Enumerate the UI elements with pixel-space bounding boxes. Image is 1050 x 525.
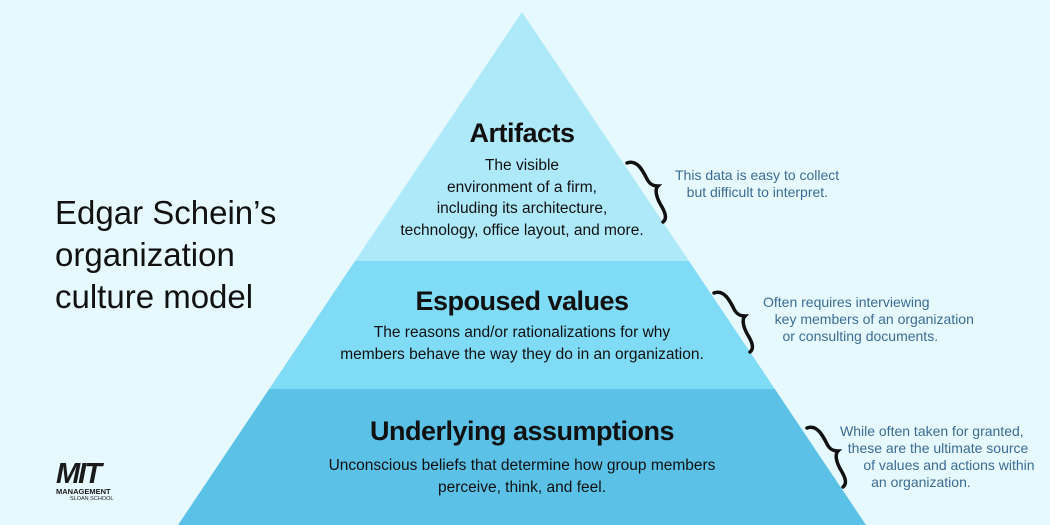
title: culture model <box>55 278 253 315</box>
brace 3 <box>807 427 846 487</box>
pyramid <box>178 12 866 525</box>
underlying text: perceive, think, and feel. <box>438 478 606 496</box>
brace 1 <box>627 162 666 222</box>
title: Edgar Schein’s <box>55 194 276 231</box>
logo <box>56 458 114 502</box>
artifacts text: environment of a firm, <box>447 178 597 196</box>
underlying heading: Underlying assumptions <box>370 416 674 446</box>
brace 2 <box>714 292 753 352</box>
note 1: This data is easy to collect but difficult to interpret. <box>675 167 839 200</box>
underlying text <box>329 457 715 496</box>
note 2: Often requires interviewing key members of an organization or consulting documents. <box>763 294 974 344</box>
espoused heading: Espoused values <box>415 286 629 316</box>
logo: SLOAN SCHOOL <box>70 496 113 502</box>
espoused text: members behave the way they do in an organization. <box>340 346 704 362</box>
title <box>55 194 276 315</box>
artifacts text: The visible <box>485 157 559 174</box>
note 3: While often taken for granted, these are the ultimate source of values and actions within an organization. <box>840 423 1035 490</box>
logo: MIT <box>56 458 100 490</box>
espoused text <box>340 324 704 362</box>
logo: MANAGEMENT <box>56 487 111 496</box>
artifacts text: including its architecture, <box>437 200 607 217</box>
artifacts text <box>400 157 644 238</box>
underlying text: Unconscious beliefs that determine how group members <box>329 457 715 474</box>
espoused text: The reasons and/or rationalizations for why <box>374 324 670 341</box>
title: organization <box>55 236 235 273</box>
artifacts text: technology, office layout, and more. <box>400 222 644 238</box>
artifacts heading: Artifacts <box>469 118 575 148</box>
